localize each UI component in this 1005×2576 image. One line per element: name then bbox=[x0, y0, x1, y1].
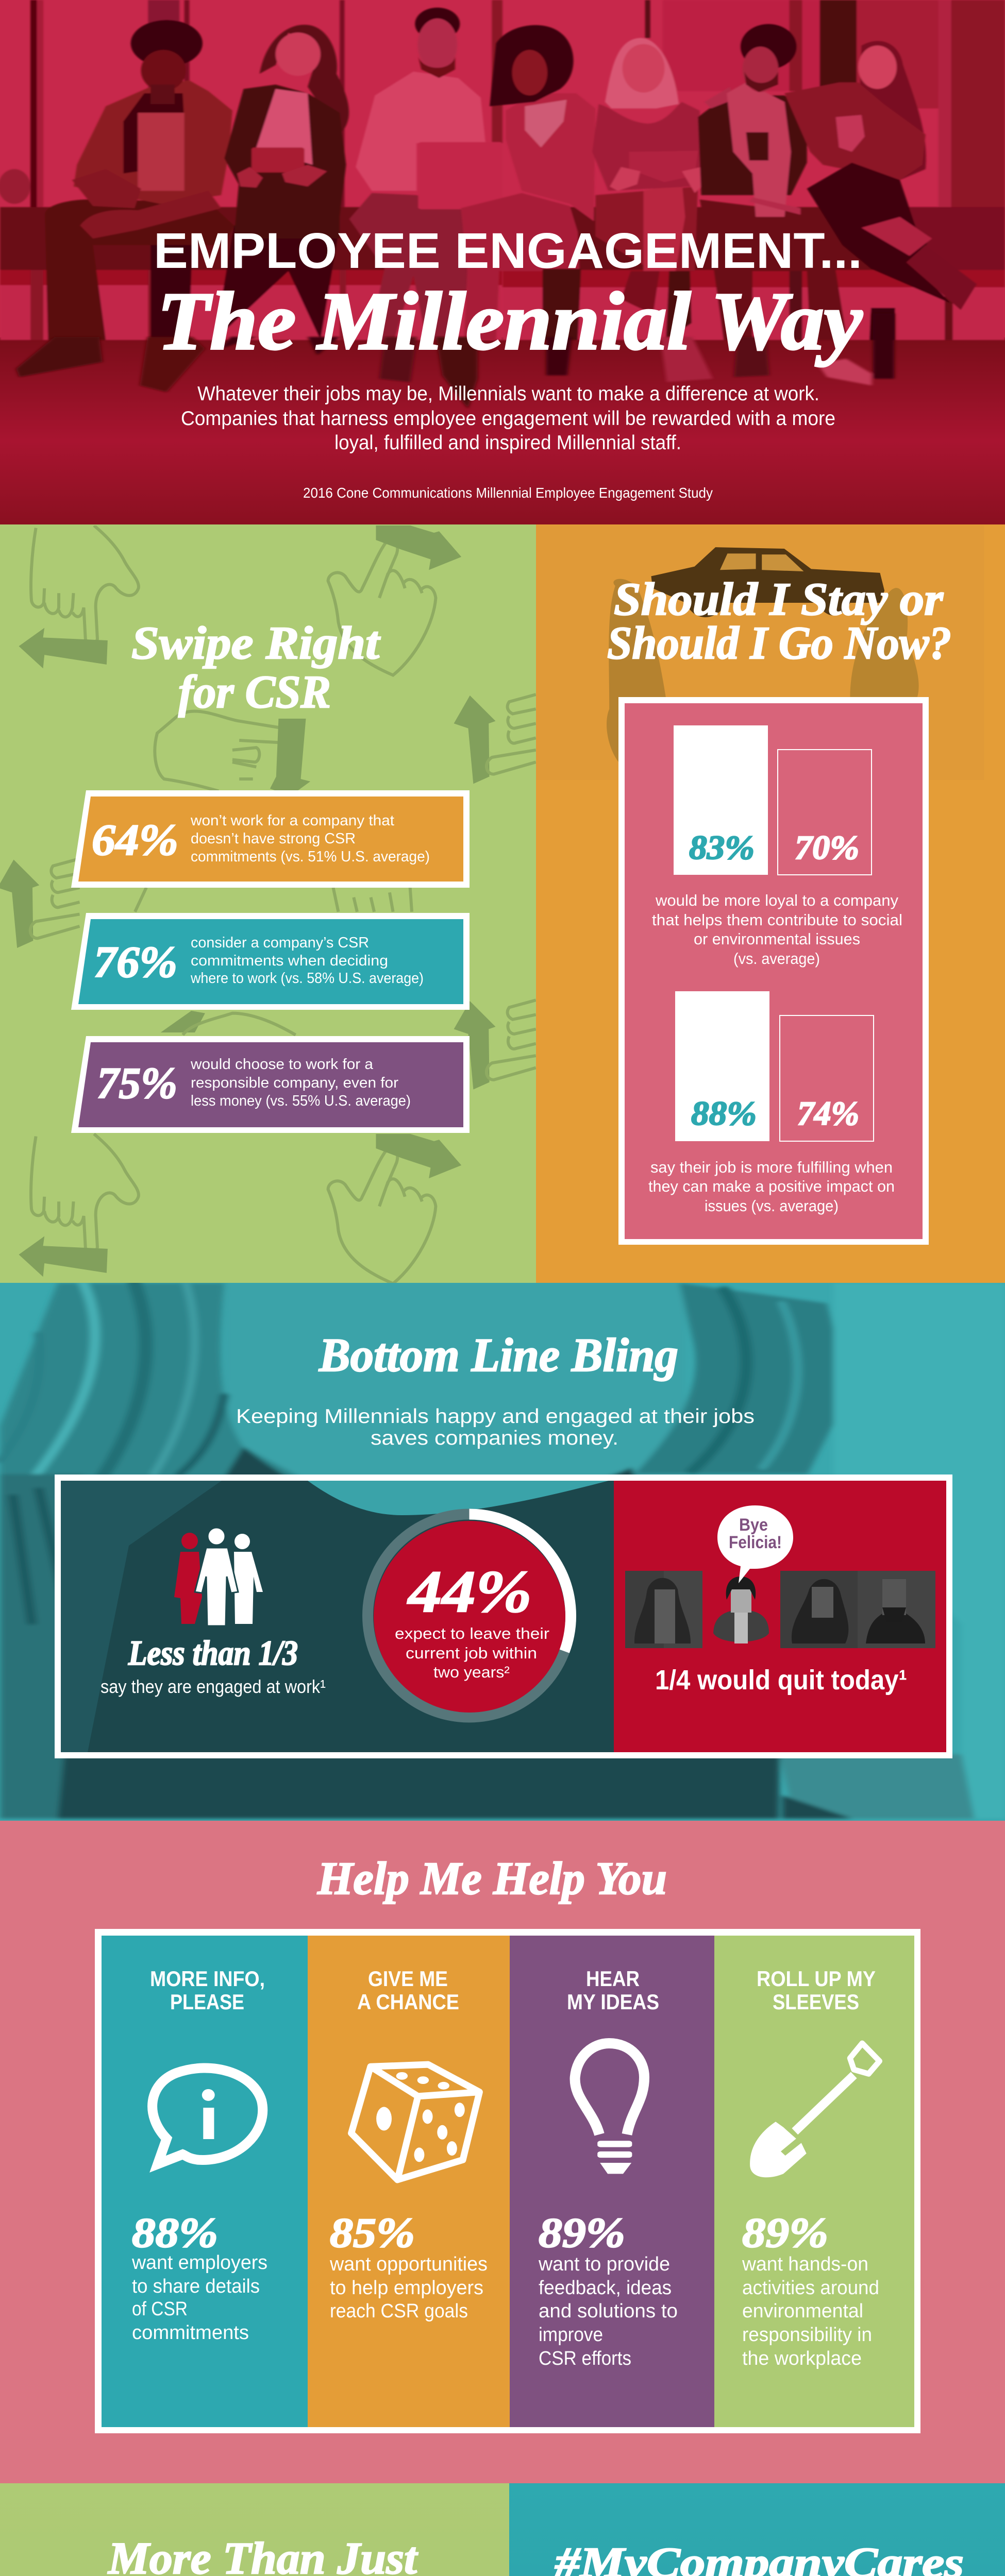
callout: bye felicia speech bubble bbox=[717, 1505, 793, 1583]
photo: selfie in teal duotone bbox=[506, 2483, 1005, 2576]
column: give me a chance: want opportunities bbox=[329, 2253, 488, 2275]
panel: my company cares more than yours bbox=[506, 2483, 1005, 2576]
left half of photo bbox=[0, 0, 502, 340]
hero introduction bbox=[181, 383, 835, 454]
caption: engaged at work: say they are engaged at work¹ bbox=[100, 1676, 326, 1697]
column: more info: commitments bbox=[132, 2322, 249, 2344]
text: fulfilment: issues (vs. average) bbox=[705, 1197, 839, 1215]
icon: three people, one highlighted bbox=[174, 1528, 263, 1626]
stat card: 75%: 75% bbox=[97, 1058, 177, 1108]
right half of photo bbox=[461, 0, 1005, 340]
column: give me a chance: A CHANCE bbox=[357, 1990, 459, 2014]
column: hear my ideas: improve bbox=[539, 2324, 603, 2346]
stat card: 64% bbox=[71, 790, 470, 888]
study credit: 2016 Cone Communications Millennial Employee Engagement Study bbox=[303, 485, 713, 501]
stat card: 75%: responsible company, even for bbox=[191, 1075, 398, 1091]
stat card: 76% bbox=[71, 913, 470, 1010]
heading: swipe right bbox=[131, 618, 381, 718]
column: more info: 88% bbox=[132, 2209, 218, 2256]
chart: 44% ring: two years² bbox=[433, 1663, 510, 1681]
text: loyalty: or environmental issues bbox=[694, 930, 860, 948]
chart: 83% vs 70% bbox=[674, 725, 872, 875]
icon: light bulb bbox=[575, 2043, 644, 2174]
stat card: 76%: 76% bbox=[94, 937, 177, 987]
column: hear my ideas: and solutions to bbox=[539, 2300, 678, 2322]
column: hear my ideas: HEAR bbox=[586, 1967, 640, 1991]
hero introduction: Companies that harness employee engagement will be rewarded with a more bbox=[181, 408, 835, 430]
stat card: 64%: commitments (vs. 51% U.S. average) bbox=[191, 849, 430, 865]
column: more info: of CSR bbox=[132, 2298, 188, 2320]
icon: portraits of four employees bbox=[625, 1571, 935, 1648]
column: give me a chance: 85% bbox=[330, 2209, 415, 2256]
stats frame bbox=[55, 1475, 952, 1758]
stat card: 64%: doesn’t have strong CSR bbox=[191, 831, 356, 847]
callout: bye felicia speech bubble: Felicia! bbox=[729, 1533, 782, 1552]
chart: 83% vs 70%: 83% bbox=[689, 829, 755, 867]
photo: selfie in green duotone bbox=[0, 2483, 509, 2576]
hero introduction: loyal, fulfilled and inspired Millennial staff. bbox=[334, 432, 681, 454]
person one bbox=[45, 20, 234, 340]
chart: 83% vs 70%: 70% bbox=[795, 829, 859, 867]
chart: 88% vs 74%: 74% bbox=[797, 1095, 859, 1132]
person five bbox=[592, 38, 708, 340]
stat card: 75%: would choose to work for a bbox=[190, 1056, 374, 1073]
stat card: 76%: commitments when deciding bbox=[191, 953, 388, 969]
stat card: 75% bbox=[71, 1036, 470, 1133]
column: hear my ideas: CSR efforts bbox=[539, 2348, 631, 2369]
title line two: The Millennial Way bbox=[157, 275, 863, 367]
intro text: saves companies money. bbox=[371, 1427, 618, 1449]
column: more info: to share details bbox=[132, 2276, 260, 2297]
column: roll up my sleeves: activities around bbox=[742, 2277, 879, 2299]
panel: should I stay or should I go bbox=[536, 524, 1005, 1283]
stat: quit today: 1/4 would quit today¹ bbox=[655, 1665, 907, 1696]
icon: info speech bubble bbox=[153, 2068, 263, 2164]
heading: swipe right: Swipe Right bbox=[131, 618, 381, 669]
hero introduction: Whatever their jobs may be, Millennials want to make a difference at work. bbox=[197, 383, 819, 405]
text: fulfilment: say their job is more fulfilling when bbox=[650, 1158, 893, 1176]
panel: more than just forced fun bbox=[0, 2483, 509, 2576]
column: hear my ideas bbox=[510, 1936, 714, 2427]
column: roll up my sleeves: want hands-on bbox=[742, 2253, 868, 2275]
column: roll up my sleeves: responsibility in bbox=[742, 2324, 872, 2346]
icon: dice bbox=[351, 2064, 479, 2180]
chart: 44% ring: 44% bbox=[407, 1559, 532, 1625]
stats card bbox=[618, 697, 929, 1245]
column: give me a chance: GIVE ME bbox=[368, 1967, 448, 1991]
chart: 88% vs 74%: 88% bbox=[691, 1095, 757, 1132]
text: loyalty bbox=[652, 891, 902, 968]
stat card: 75%: less money (vs. 55% U.S. average) bbox=[191, 1093, 411, 1109]
panel: help me help you bbox=[0, 1821, 1005, 2483]
person three bbox=[349, 8, 502, 340]
stat card: 76%: where to work (vs. 58% U.S. average) bbox=[190, 970, 424, 987]
heading: help me help you: Help Me Help You bbox=[317, 1853, 667, 1904]
photo: group of millennials on a bench bbox=[0, 0, 1005, 526]
text: loyalty: (vs. average) bbox=[733, 950, 820, 968]
column: more info: want employers bbox=[131, 2252, 267, 2274]
stat card: 76%: consider a company’s CSR bbox=[191, 935, 369, 951]
column: roll up my sleeves bbox=[714, 1936, 914, 2427]
column: roll up my sleeves: SLEEVES bbox=[773, 1990, 859, 2014]
icon: background swipe hands bbox=[0, 526, 536, 1283]
heading: bottom line bling: Bottom Line Bling bbox=[319, 1329, 678, 1381]
panel: bottom line bling bbox=[0, 1283, 1005, 1821]
shoes and lower legs on the floor bbox=[16, 313, 894, 409]
person four bbox=[461, 25, 595, 340]
intro text bbox=[236, 1405, 755, 1449]
column: give me a chance: to help employers bbox=[330, 2277, 483, 2299]
chart: 44% ring: expect to leave their bbox=[395, 1624, 549, 1642]
text: loyalty: would be more loyal to a company bbox=[655, 891, 898, 909]
heading: should I stay: Should I Go Now? bbox=[607, 618, 951, 669]
column: roll up my sleeves: environmental bbox=[742, 2300, 863, 2322]
person six bbox=[698, 24, 847, 340]
stat card: 64%: 64% bbox=[92, 815, 178, 865]
heading: should I stay: Should I Stay or bbox=[614, 574, 944, 625]
column: give me a chance bbox=[308, 1936, 510, 2427]
chart: 44% ring: current job within bbox=[406, 1644, 537, 1662]
heading: swipe right: for CSR bbox=[178, 667, 331, 718]
column: hear my ideas: MY IDEAS bbox=[567, 1990, 659, 2014]
columns frame bbox=[95, 1929, 920, 2433]
panel: swipe right for CSR bbox=[0, 524, 536, 1283]
chart: 88% vs 74% bbox=[675, 991, 874, 1141]
column: more info: PLEASE bbox=[170, 1990, 244, 2014]
panel: hero bbox=[0, 0, 1005, 526]
stat card: 64%: won’t work for a company that bbox=[190, 812, 394, 829]
column: give me a chance: reach CSR goals bbox=[330, 2300, 468, 2322]
stat: less than one third: Less than 1/3 bbox=[128, 1633, 298, 1672]
photo: woman with long hair bbox=[0, 1283, 1005, 1821]
column: roll up my sleeves: the workplace bbox=[742, 2348, 862, 2369]
text: fulfilment bbox=[648, 1158, 895, 1215]
intro text: Keeping Millennials happy and engaged at their jobs bbox=[236, 1405, 755, 1428]
column: hear my ideas: want to provide bbox=[538, 2253, 670, 2275]
heading: should I stay bbox=[607, 574, 951, 669]
person seven bbox=[784, 41, 977, 340]
person two bbox=[215, 25, 349, 340]
photo: toy car held by fingers bbox=[536, 526, 984, 780]
text: fulfilment: they can make a positive impact on bbox=[648, 1177, 895, 1195]
text: loyalty: that helps them contribute to social bbox=[652, 911, 902, 929]
column: roll up my sleeves: 89% bbox=[742, 2209, 828, 2256]
column: hear my ideas: 89% bbox=[539, 2209, 625, 2256]
icon: shovel bbox=[750, 2043, 879, 2177]
callout: bye felicia speech bubble: Bye bbox=[739, 1515, 768, 1535]
column: roll up my sleeves: ROLL UP MY bbox=[757, 1967, 876, 1991]
column: hear my ideas: feedback, ideas bbox=[539, 2277, 672, 2299]
column: more info bbox=[102, 1936, 308, 2427]
title line one: EMPLOYEE ENGAGEMENT... bbox=[154, 223, 862, 279]
column: more info: MORE INFO, bbox=[150, 1967, 265, 1991]
chart: 44% ring bbox=[368, 1514, 571, 1717]
person with glasses bbox=[713, 1577, 769, 1643]
